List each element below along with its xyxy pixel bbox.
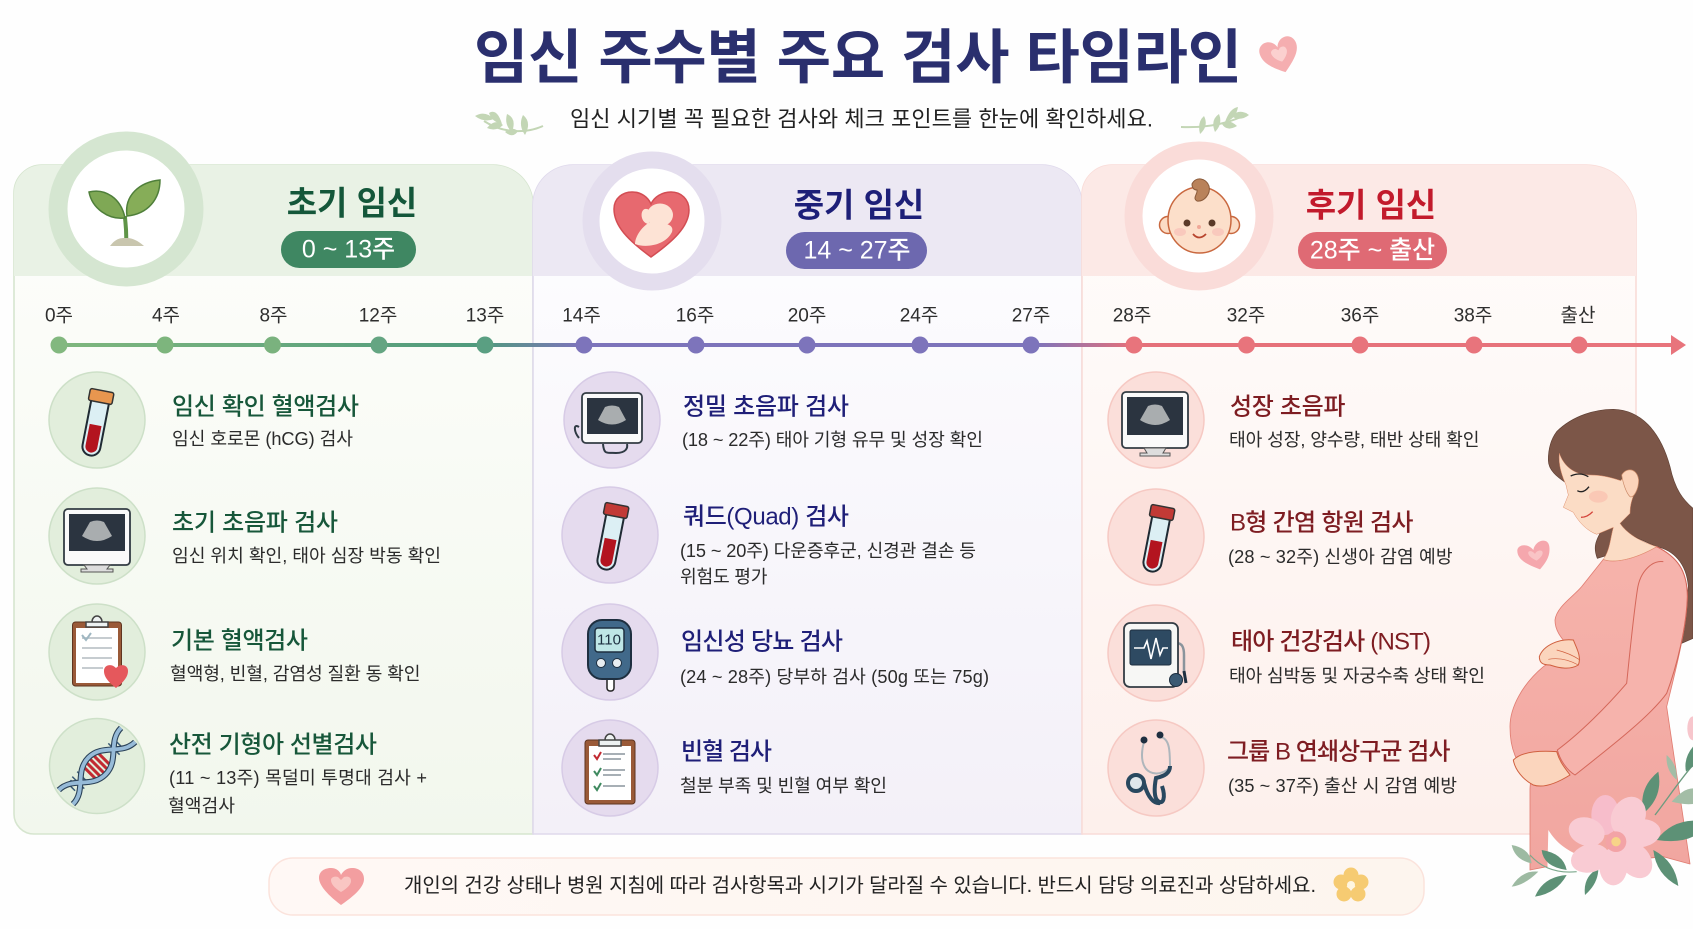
timeline dots: mid (576, 336, 1040, 354)
footer note (269, 858, 1424, 915)
item: basic blood test: 혈액형, 빈혈, 감염성 질환 동 확인 (170, 664, 420, 684)
item: detailed ultrasound (564, 372, 983, 468)
early range pill (281, 231, 416, 268)
week labels: 13주 (466, 306, 504, 326)
item: growth ultrasound: 성장 초음파 (1230, 394, 1346, 420)
icon: DNA helix (50, 718, 144, 814)
dress (1510, 547, 1690, 870)
icon: test tube red (1108, 489, 1204, 585)
icon: footer heart (319, 868, 364, 905)
item: quad test: 위험도 평가 (680, 567, 768, 587)
icon: sprout badge (58, 141, 194, 277)
item: growth ultrasound: 태아 성장, 양수량, 태반 상태 확인 (1229, 430, 1480, 450)
upper hand (1539, 640, 1579, 668)
item: growth ultrasound (1108, 372, 1480, 468)
item: GBS (1108, 720, 1457, 816)
illustration: pregnant woman (1510, 409, 1693, 872)
item: pregnancy blood test: 임신 호로몬 (hCG) 검사 (172, 429, 353, 449)
week labels: 4주 (152, 306, 180, 326)
item: gestational diabetes (562, 604, 989, 700)
item: pregnancy blood test: 임신 확인 혈액검사 (172, 394, 359, 420)
sleeve (1557, 547, 1687, 775)
item: GBS: 그룹 B 연쇄상구균 검사 (1227, 738, 1450, 766)
item: prenatal screening: (11 ~ 13주) 목덜미 투명대 검사 + (169, 768, 427, 788)
panel header: late (1082, 165, 1636, 276)
icon: glucose meter: 110 (597, 632, 621, 648)
item: early ultrasound (49, 488, 441, 584)
item: GBS: (35 ~ 37주) 출산 시 감염 예방 (1228, 776, 1457, 796)
week labels (45, 304, 1595, 326)
lower hand (1513, 751, 1570, 786)
icon: clipboard with heart (49, 604, 145, 700)
early range pill: 0 ~ 13주 (302, 236, 395, 264)
week labels: 16주 (676, 306, 714, 326)
title: 임신 주수별 주요 검사 타임라인 (474, 25, 1242, 91)
face details (1577, 487, 1589, 492)
icon: ultrasound machine (564, 372, 660, 468)
item: hepatitis B: B형 간염 항원 검사 (1230, 510, 1414, 536)
late heading: 후기 임신 (1306, 186, 1436, 224)
timeline arrow (50, 335, 1686, 355)
icon: test tube orange (49, 372, 145, 468)
neck and face (1559, 453, 1657, 561)
week labels: 출산 (1561, 304, 1595, 326)
mid range pill (786, 232, 927, 269)
icon: clipboard checklist (562, 720, 658, 816)
panel: mid pregnancy (533, 165, 1082, 834)
item: quad test: 쿼드(Quad) 검사 (683, 504, 849, 530)
icon: right leaf sprig (1181, 107, 1249, 134)
item: hepatitis B: (28 ~ 32주) 신생아 감염 예방 (1228, 547, 1453, 567)
week labels: 12주 (359, 306, 397, 326)
item: NST (1108, 605, 1485, 701)
item: basic blood test (49, 604, 420, 700)
item: anemia: 빈혈 검사 (681, 738, 772, 766)
footer note: 개인의 건강 상태나 병원 지침에 따라 검사항목과 시기가 달라질 수 있습니다. 반드시 담당 의료진과 상담하세요. (404, 874, 1316, 897)
icon: test tube red (562, 487, 658, 583)
icon: baby face badge (1134, 150, 1264, 282)
item: detailed ultrasound: (18 ~ 22주) 태아 기형 유무 및 성장 확인 (682, 430, 983, 450)
week labels: 20주 (788, 306, 826, 326)
item: hepatitis B (1108, 489, 1453, 585)
week labels: 24주 (900, 306, 938, 326)
week labels: 8주 (259, 306, 288, 326)
item: gestational diabetes: (24 ~ 28주) 당부하 검사 (50g 또는 75g) (680, 667, 989, 687)
panel: late pregnancy (1082, 165, 1636, 834)
icon: stethoscope (1108, 720, 1204, 816)
icon: ultrasound monitor (49, 488, 145, 584)
early heading: 초기 임신 (287, 184, 417, 222)
illustration: flowers and leaves (1512, 716, 1693, 897)
icon: glucose meter (562, 604, 658, 700)
item: detailed ultrasound: 정밀 초음파 검사 (683, 394, 849, 420)
panel: early pregnancy (14, 165, 533, 834)
week labels: 36주 (1341, 306, 1379, 326)
mid heading: 중기 임신 (794, 186, 924, 224)
item: early ultrasound: 초기 초음파 검사 (172, 510, 338, 536)
item: prenatal screening: 혈액검사 (168, 796, 235, 816)
item: early ultrasound: 임신 위치 확인, 태아 심장 박동 확인 (172, 546, 441, 566)
icon: floating heart (1517, 541, 1550, 569)
skirt slit (1547, 830, 1580, 872)
item: basic blood test: 기본 혈액검사 (171, 628, 308, 654)
item: quad test (562, 487, 976, 587)
subtitle: 임신 시기별 꼭 필요한 검사와 체크 포인트를 한눈에 확인하세요. (570, 106, 1153, 132)
item: quad test: (15 ~ 20주) 다운증후군, 신경관 결손 등 (680, 541, 976, 561)
icon: ultrasound monitor (1108, 372, 1204, 468)
week labels: 28주 (1113, 306, 1151, 326)
panel header: early (14, 165, 533, 276)
icon: fetal heart monitor (1108, 605, 1204, 701)
late range pill: 28주 ~ 출산 (1310, 236, 1435, 264)
mid range pill: 14 ~ 27주 (803, 236, 911, 264)
item: anemia (562, 720, 887, 816)
icon: heart with fetus badge (591, 160, 713, 282)
late range pill (1298, 232, 1447, 269)
timeline dots: late (1126, 336, 1588, 354)
item: NST: 태아 건강검사 (NST) (1231, 628, 1431, 656)
panel header: mid (533, 165, 1082, 276)
item: gestational diabetes: 임신성 당뇨 검사 (681, 628, 843, 656)
week labels: 38주 (1454, 306, 1492, 326)
hair (1548, 409, 1693, 643)
item: prenatal screening (50, 718, 427, 816)
item: anemia: 철분 부족 및 빈혈 여부 확인 (680, 776, 887, 796)
icon: left leaf sprig (475, 112, 543, 135)
item: pregnancy blood test (49, 372, 359, 468)
week labels: 0주 (45, 306, 73, 326)
icon: yellow flower (1334, 868, 1368, 902)
item: prenatal screening: 산전 기형아 선별검사 (169, 732, 377, 758)
ear (1622, 470, 1639, 497)
week labels: 27주 (1012, 306, 1050, 326)
week labels: 14주 (562, 306, 601, 326)
icon: title heart (1257, 34, 1304, 78)
week labels: 32주 (1227, 306, 1265, 326)
timeline dots: early (50, 336, 494, 354)
item: NST: 태아 심박동 및 자궁수축 상태 확인 (1229, 666, 1485, 686)
